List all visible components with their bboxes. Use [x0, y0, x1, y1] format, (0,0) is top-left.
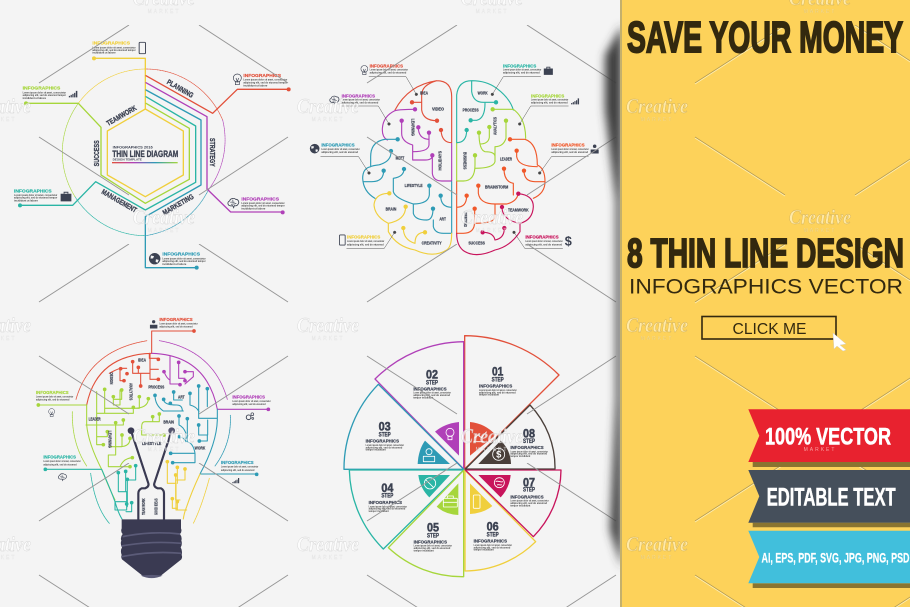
- step 03: tempor incididunt: [366, 448, 386, 452]
- callout: yellow: incididunt ut labore: [92, 51, 116, 55]
- brain labels: PROCESS: [463, 108, 479, 113]
- watermarks: yellow panel: MARKET: [804, 228, 836, 234]
- callout: lime: Lorem ipsum dolor sit amet, consectetur: [36, 394, 74, 398]
- callout: yellow: Lorem ipsum dolor sit amet, consectetur: [347, 239, 385, 243]
- center title: THIN LINE DIAGRAM: [112, 149, 178, 159]
- pie sector outlines: [344, 336, 561, 577]
- bulb labels: [89, 358, 206, 515]
- bulb outline and circuits: [38, 331, 268, 519]
- brain labels: [386, 91, 529, 246]
- callout: green: incididunt ut labore: [23, 96, 46, 100]
- callout: blue: Lorem ipsum dolor sit amet, consectetur: [321, 147, 360, 151]
- callout: blue: INFOGRAPHICS: [162, 252, 200, 257]
- callout: purple: INFOGRAPHICS: [232, 395, 265, 400]
- callout: crimson: INFOGRAPHICS: [525, 234, 559, 239]
- step 08: INFOGRAPHICS: [510, 445, 544, 450]
- callout: blue: incididunt ut labore: [162, 262, 187, 266]
- callout: green: [23, 86, 77, 100]
- callout: blue: adipiscing elit, sed do eiusmod: [321, 150, 358, 154]
- step 08: STEP: [523, 438, 535, 445]
- bulb labels: WORK: [195, 445, 206, 450]
- callout: blue: Lorem ipsum dolor sit amet, consectetur: [162, 256, 206, 260]
- brain labels: HOLIDAYS: [438, 151, 443, 170]
- step 07: adipiscing elit, sed do eiusmod: [510, 501, 547, 505]
- step 03: adipiscing elit, sed do eiusmod: [366, 445, 403, 449]
- callout: green: Lorem ipsum dolor sit amet, consectetur: [23, 90, 67, 94]
- step 07: [510, 475, 549, 507]
- callout: purple: Lorem ipsum dolor sit amet, consectetur: [342, 98, 381, 102]
- bulb labels: PROCESS: [148, 385, 164, 390]
- bulb labels: BRAIN: [163, 419, 174, 424]
- step 06: INFOGRAPHICS: [474, 539, 507, 544]
- callout: yellow: INFOGRAPHICS: [92, 41, 130, 46]
- brain labels: CREATIVITY: [422, 240, 442, 245]
- bulb labels: IDEA: [138, 358, 147, 363]
- watermarks: grey panels: MARKET: [312, 555, 344, 561]
- watermarks: grey panels: MARKET: [148, 228, 180, 234]
- step 06: adipiscing elit, sed do eiusmod: [474, 545, 511, 549]
- hexagon lines: [20, 58, 289, 268]
- callout: blue: INFOGRAPHICS: [221, 460, 254, 465]
- brain labels: BRAIN: [386, 207, 396, 212]
- callout: red: Lorem ipsum dolor sit amet, consectetur: [159, 321, 198, 325]
- watermark lines: yellow panel: [622, 0, 910, 607]
- step 02: 02: [426, 367, 438, 381]
- watermarks: yellow panel: [626, 0, 851, 561]
- step 05: 05: [427, 521, 439, 535]
- watermarks: grey panels: Creative: [297, 313, 359, 337]
- callout: purple: Lorem ipsum dolor sit amet, consectetur: [241, 201, 285, 205]
- watermarks: grey panels: MARKET: [312, 117, 344, 123]
- brain labels: LEADER: [500, 156, 513, 161]
- callout: yellow: [92, 41, 145, 55]
- callout: teal: Lorem ipsum dolor sit amet, consectetur: [503, 68, 542, 72]
- callout: blue: [310, 142, 360, 154]
- step 07: INFOGRAPHICS: [510, 494, 544, 499]
- segment labels: PLANNING: [165, 77, 195, 100]
- bulb labels: DESIGN: [109, 372, 114, 384]
- watermarks: yellow panel: Creative: [789, 205, 851, 229]
- step 01: 01: [492, 365, 503, 379]
- step 01: INFOGRAPHICS: [479, 384, 512, 389]
- brain labels: SUCCESS: [468, 241, 485, 246]
- callout: teal: INFOGRAPHICS: [503, 63, 536, 68]
- junction dots: [381, 100, 526, 234]
- callout: orange: Lorem ipsum dolor sit amet, consectetur: [551, 147, 589, 151]
- circuit dots: [36, 329, 270, 506]
- watermarks: grey panels: MARKET: [312, 336, 344, 342]
- center title: [112, 146, 178, 163]
- step 07: Lorem ipsum dolor sit amet, consectetur: [510, 499, 549, 503]
- panel: eight step pie: [344, 336, 561, 577]
- inner wedges: [418, 422, 511, 515]
- step 03: 03: [379, 419, 391, 433]
- watermarks: yellow panel: MARKET: [641, 555, 673, 561]
- callout: green: Lorem ipsum dolor sit amet, consectetur: [531, 98, 569, 102]
- callout: blue: [149, 252, 206, 266]
- callout: red: Lorem ipsum dolor sit amet, consectetur: [243, 78, 288, 82]
- callout: teal: Lorem ipsum dolor sit amet, consectetur: [43, 459, 81, 463]
- step 02: tempor incididunt: [413, 395, 433, 399]
- bulb labels: LIFESTYLE: [142, 441, 161, 446]
- watermarks: grey panels: Creative: [461, 205, 523, 229]
- brain labels: ART: [439, 217, 446, 222]
- callout: teal: [43, 454, 81, 480]
- step 03: Lorem ipsum dolor sit amet, consectetur: [366, 443, 405, 447]
- watermarks: grey panels: MARKET: [148, 9, 180, 15]
- callout: red: INFOGRAPHICS: [243, 73, 281, 78]
- ribbon: editable text: [748, 470, 910, 527]
- ribbon: file formats: [748, 531, 910, 588]
- step 08: tempor incididunt: [510, 454, 530, 458]
- step 04: STEP: [381, 493, 394, 500]
- step 01: STEP: [492, 377, 504, 384]
- filament: [128, 427, 175, 519]
- step 04: 04: [381, 481, 393, 495]
- callout: blue: adipiscing elit, sed do eiusmod: [221, 468, 255, 472]
- watermarks: yellow panel: MARKET: [804, 9, 836, 15]
- step 04: [369, 481, 408, 513]
- watermarks: grey panels: MARKET: [148, 447, 180, 453]
- step 06: [474, 520, 513, 552]
- step 06: Lorem ipsum dolor sit amet, consectetur: [474, 543, 513, 547]
- callout: purple: adipiscing elit, sed do eiusmod: [342, 100, 379, 104]
- center title: DESIGN TEMPLATE: [113, 157, 142, 161]
- step 08: adipiscing elit, sed do eiusmod: [510, 452, 547, 456]
- callout: green: INFOGRAPHICS: [531, 93, 564, 98]
- callout: teal: Lorem ipsum dolor sit amet, consectetur: [14, 193, 58, 197]
- step 04: Lorem ipsum dolor sit amet, consectetur: [369, 504, 408, 508]
- bulb labels: TEAM WORK: [141, 498, 146, 515]
- watermarks: grey panels: MARKET: [476, 9, 508, 15]
- callout: blue: adipiscing elit, sed do eiusmod tempor: [162, 259, 206, 263]
- panel: hexagon thin line diagram: [14, 41, 291, 270]
- brain labels: VIDEO: [432, 107, 445, 112]
- step 06: 06: [487, 520, 499, 534]
- callout: purple: INFOGRAPHICS: [342, 93, 375, 98]
- ribbon: 100% vector: [748, 409, 910, 467]
- callout: purple: adipiscing elit, sed do eiusmod tempor: [241, 204, 285, 208]
- callout: red: adipiscing elit, sed do eiusmod: [370, 70, 407, 74]
- panel: light bulb diagram: [36, 317, 271, 578]
- step 04: adipiscing elit, sed do eiusmod: [369, 507, 406, 511]
- step 01: adipiscing elit, sed do eiusmod: [479, 390, 516, 394]
- callout: teal: [14, 188, 71, 203]
- dashed circle: [62, 69, 225, 236]
- step 04: INFOGRAPHICS: [369, 500, 402, 505]
- callout: red: Lorem ipsum dolor sit amet, consectetur: [370, 68, 409, 72]
- callout: red: [361, 63, 409, 75]
- callout: teal: adipiscing elit, sed do eiusmod: [43, 462, 77, 466]
- callout: yellow: Lorem ipsum dolor sit amet, consectetur: [92, 45, 136, 49]
- segment labels: [92, 77, 217, 217]
- step 06: tempor incididunt: [474, 548, 494, 552]
- callout leader lines: [321, 77, 588, 249]
- line end dots: [18, 56, 291, 270]
- watermarks: grey panels: MARKET: [476, 228, 508, 234]
- segment labels: MANAGEMENT: [100, 187, 139, 215]
- callout: blue: INFOGRAPHICS: [321, 142, 355, 147]
- step 05: Lorem ipsum dolor sit amet, consectetur: [414, 544, 453, 548]
- step 03: INFOGRAPHICS: [366, 439, 399, 444]
- step 08: [510, 427, 549, 458]
- step 02: INFOGRAPHICS: [413, 387, 447, 392]
- panel shadow: [605, 25, 622, 568]
- screw base: [121, 519, 182, 578]
- callout: red: adipiscing elit, sed do eiusmod: [159, 324, 193, 328]
- callout: yellow: INFOGRAPHICS: [347, 234, 380, 239]
- callout: teal: adipiscing elit, sed do eiusmod tempor: [14, 196, 58, 200]
- callout: teal: INFOGRAPHICS: [14, 188, 52, 193]
- step 01: tempor incididunt: [479, 393, 499, 397]
- bulb labels: LEARNING: [107, 431, 112, 448]
- brain labels: MEETING: [463, 212, 468, 227]
- callout: yellow: adipiscing elit, sed do eiusmod: [347, 242, 384, 246]
- step 03: [366, 419, 405, 452]
- callout: yellow: adipiscing elit, sed do eiusmod tempor: [92, 48, 136, 52]
- step 07: tempor incididunt: [510, 503, 530, 507]
- callout: lime: INFOGRAPHICS: [36, 390, 69, 395]
- callout: blue: [221, 460, 259, 483]
- step 01: [479, 365, 517, 397]
- callout: red: [150, 317, 198, 329]
- callout: red: INFOGRAPHICS: [370, 63, 403, 68]
- segment labels: SUCCESS: [92, 140, 101, 166]
- segment labels: MARKETING: [161, 192, 196, 217]
- button: click me: [702, 316, 836, 339]
- panel: yellow promo: [620, 0, 910, 607]
- center title: INFOGRAPHICS 2016: [113, 146, 153, 150]
- step 02: STEP: [426, 379, 438, 386]
- step 05: INFOGRAPHICS: [414, 539, 447, 544]
- brain labels: MEET: [396, 155, 405, 160]
- watermarks: grey panels: MARKET: [476, 447, 508, 453]
- watermarks: yellow panel: Creative: [626, 94, 688, 118]
- watermarks: grey panels: Creative: [297, 94, 359, 118]
- watermarks: yellow panel: MARKET: [641, 117, 673, 123]
- callout: red: INFOGRAPHICS: [159, 317, 193, 322]
- callout: purple: incididunt ut labore: [241, 207, 266, 211]
- callout: red: adipiscing elit, sed do eiusmod tempor: [243, 80, 288, 84]
- brain labels: ANALYTICS: [493, 117, 498, 135]
- callout: teal: INFOGRAPHICS: [43, 454, 76, 459]
- callout: green: adipiscing elit, sed do eiusmod tempor: [23, 93, 67, 97]
- callout: lime: [36, 390, 74, 417]
- step 07: STEP: [523, 487, 535, 494]
- callout: purple: [330, 93, 381, 104]
- step 02: Lorem ipsum dolor sit amet, consectetur: [413, 391, 452, 395]
- wedge icons: [423, 428, 505, 508]
- brain labels: IDEA: [420, 91, 429, 96]
- watermarks: grey panels: [0, 0, 523, 561]
- step 05: tempor incididunt: [414, 548, 434, 552]
- brain labels: BRAINSTORM: [485, 184, 509, 189]
- step 02: [413, 367, 452, 399]
- callout: crimson: $: [565, 235, 572, 249]
- step 07: 07: [523, 475, 535, 489]
- watermark lines: grey panels: [0, 0, 621, 607]
- callout: crimson: Lorem ipsum dolor sit amet, consectetur: [525, 239, 563, 243]
- callout: yellow: [339, 234, 385, 246]
- callout: green: [531, 93, 579, 104]
- brain circuit lines: [363, 81, 545, 255]
- callout: purple: adipiscing elit, sed do eiusmod: [232, 402, 266, 406]
- brain labels: TEAMWORK: [508, 207, 529, 212]
- segment labels: STRATEGY: [208, 138, 217, 167]
- segment labels: TEAMWORK: [105, 103, 139, 128]
- bulb labels: ART: [178, 394, 185, 399]
- step 05: [414, 521, 453, 552]
- step 05: adipiscing elit, sed do eiusmod: [414, 546, 451, 550]
- callout: blue: Lorem ipsum dolor sit amet, consectetur: [221, 465, 259, 469]
- bulb labels: LEADER: [89, 416, 101, 421]
- watermarks: yellow panel: MARKET: [641, 336, 673, 342]
- callout: purple: Lorem ipsum dolor sit amet, consectetur: [232, 399, 271, 403]
- watermarks: yellow panel: Creative: [626, 313, 688, 337]
- panel: brain diagram: [310, 63, 599, 255]
- watermarks: grey panels: Creative: [133, 205, 195, 229]
- callout: teal: adipiscing elit, sed do eiusmod: [503, 70, 540, 74]
- watermarks: grey panels: Creative: [297, 532, 359, 556]
- step 04: tempor incididunt: [369, 509, 389, 513]
- dollar glyph: $: [496, 450, 502, 460]
- brain labels: LIFESTYLE: [405, 183, 423, 188]
- step 02: adipiscing elit, sed do eiusmod: [413, 393, 450, 397]
- watermarks: grey panels: Creative: [461, 424, 523, 448]
- ribbon: 100% vector: MARKET: [804, 447, 836, 453]
- step 06: STEP: [487, 532, 499, 539]
- step 05: STEP: [427, 532, 439, 539]
- callout: orange: adipiscing elit, sed do eiusmod: [551, 150, 588, 154]
- callout: orange: [551, 142, 599, 154]
- callout: teal: incididunt ut labore: [14, 199, 38, 203]
- callout: green: adipiscing elit, sed do eiusmod: [531, 100, 568, 104]
- step 08: Lorem ipsum dolor sit amet, consectetur: [510, 449, 549, 453]
- brain labels: WORK: [478, 91, 488, 96]
- bulb labels: GOOD IDEAS: [154, 498, 159, 515]
- step 01: Lorem ipsum dolor sit amet, consectetur: [479, 388, 517, 392]
- icon: cursor: [833, 333, 846, 351]
- callout: orange: INFOGRAPHICS: [551, 142, 585, 147]
- callout: purple: INFOGRAPHICS: [241, 196, 279, 201]
- callout: crimson: adipiscing elit, sed do eiusmod: [525, 242, 562, 246]
- brain labels: BUSINESS: [463, 152, 468, 169]
- watermarks: yellow panel: Creative: [626, 532, 688, 556]
- callout: lime: adipiscing elit, sed do eiusmod: [36, 398, 70, 402]
- subheading: INFOGRAPHICS VECTOR: [629, 274, 903, 298]
- bulb labels: ANALYTICS: [129, 383, 134, 400]
- brain labels: LEARNING: [410, 119, 415, 136]
- step 08: 08: [523, 427, 535, 441]
- callout: teal: [503, 63, 553, 75]
- callout: red: [233, 73, 288, 87]
- dashed outer arcs: [72, 341, 230, 523]
- step 03: STEP: [379, 432, 391, 439]
- callout: red: incididunt ut labore: [243, 83, 268, 87]
- watermarks: grey panels: Creative: [133, 424, 195, 448]
- callout: green: INFOGRAPHICS: [23, 86, 60, 91]
- callout: crimson: [525, 234, 572, 249]
- callout: purple: [232, 395, 271, 420]
- callout: purple: [228, 196, 285, 211]
- button: click me: CLICK ME: [732, 321, 806, 338]
